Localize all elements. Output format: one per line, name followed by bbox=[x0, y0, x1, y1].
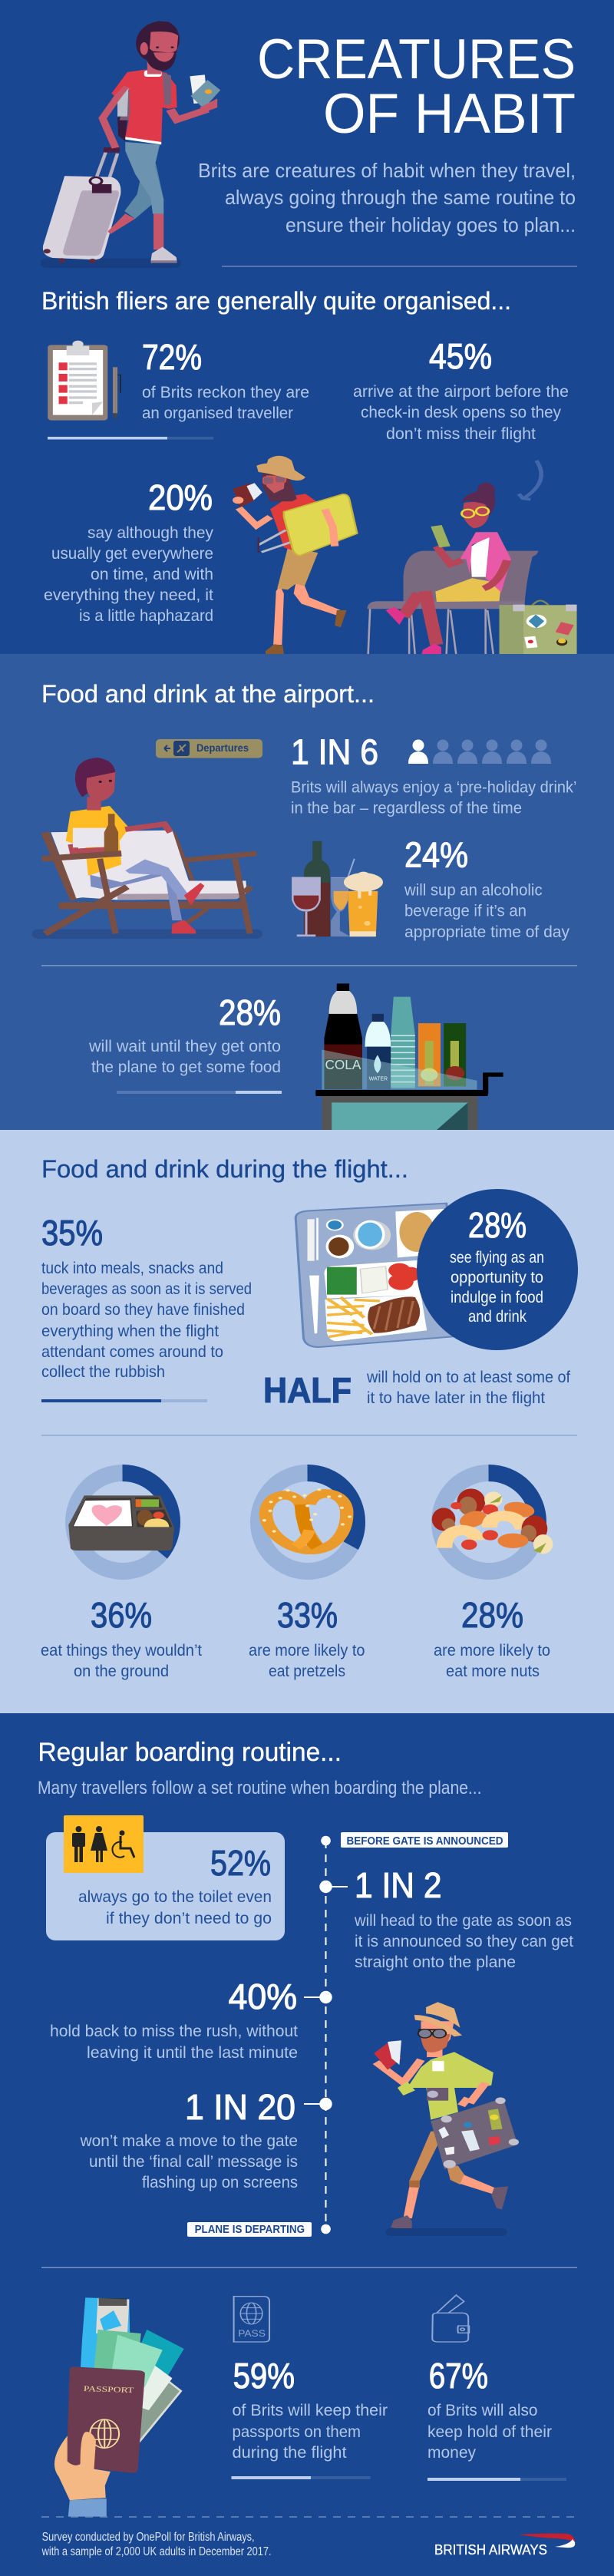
intro text: always going through the same routine to bbox=[225, 186, 576, 209]
source note: Survey conducted by OnePoll for British Airways, bbox=[42, 2531, 255, 2544]
stat: 59% bbox=[232, 2356, 388, 2479]
stat: 28% wait: will wait until they get onto bbox=[88, 1037, 281, 1055]
callout: 28% circle: 28% bbox=[468, 1205, 527, 1245]
timeline bbox=[304, 1836, 348, 2234]
illustration: drinks trolley: WATER bbox=[369, 1075, 388, 1082]
icon: wallet outline bbox=[432, 2295, 469, 2342]
stat: 28% wait: the plane to get some food bbox=[91, 1058, 281, 1076]
stat: 67%: keep hold of their bbox=[427, 2422, 552, 2441]
icon: drinks bbox=[292, 841, 383, 936]
stat: 45%: 45% bbox=[429, 336, 492, 376]
illustration: drinks trolley: COLA bbox=[325, 1058, 361, 1072]
stat: 28% nuts: are more likely to bbox=[434, 1641, 550, 1660]
stat: 24%: will sup an alcoholic bbox=[404, 881, 543, 900]
illustration: man with hat and suitcase bbox=[374, 2002, 519, 2236]
stat: 28% nuts: 28% bbox=[461, 1595, 523, 1635]
stat: 20%: say although they bbox=[87, 523, 213, 542]
card: 52% toilet bbox=[46, 1815, 285, 1940]
stat: half: will hold on to at least some of bbox=[366, 1368, 570, 1386]
stat: 24% bbox=[404, 835, 569, 941]
stat: 36%: on the ground bbox=[74, 1662, 169, 1680]
heading: Food and drink during the flight... bbox=[41, 1155, 408, 1183]
stat: 20%: 20% bbox=[148, 477, 213, 517]
stat: 72%: 72% bbox=[142, 337, 202, 377]
stat: 1 in 2: it is announced so they can get bbox=[355, 1932, 573, 1950]
stat: 24%: appropriate time of day bbox=[404, 923, 569, 941]
stat: 1 in 20: flashing up on screens bbox=[142, 2173, 298, 2191]
stat: 40% bbox=[50, 1977, 298, 2062]
stat: 20%: on time, and with bbox=[91, 565, 213, 583]
icon: pretzel bbox=[262, 1488, 352, 1550]
panel: regular boarding routine bbox=[0, 1713, 614, 2576]
stat: 28% nuts bbox=[434, 1595, 550, 1680]
stat: 72% bbox=[48, 337, 309, 439]
title: CREATURES bbox=[257, 28, 576, 91]
callout: 28% circle: indulge in food bbox=[451, 1288, 543, 1306]
icon: people row bbox=[408, 740, 551, 764]
stat: 1 in 20: 1 IN 20 bbox=[185, 2087, 295, 2127]
logo: British Airways: BRITISH AIRWAYS bbox=[434, 2542, 547, 2558]
stat: 1 in 20: won’t make a move to the gate bbox=[80, 2132, 298, 2150]
stat: 1 in 6: 1 IN 6 bbox=[291, 732, 378, 772]
illustration: hand holding passport, tickets and cash: PASSPORT bbox=[83, 2384, 134, 2395]
callout: 28% circle: see flying as an bbox=[450, 1248, 544, 1267]
illustration: meal tray bbox=[295, 1204, 466, 1347]
stat: half bbox=[263, 1368, 570, 1410]
card: 52% toilet: 52% bbox=[210, 1843, 271, 1883]
illustration: drinks trolley bbox=[315, 983, 503, 1134]
callout: 28% circle: and drink bbox=[468, 1307, 527, 1326]
stat: half: it to have later in the flight bbox=[367, 1389, 545, 1407]
icon: bento box bbox=[68, 1495, 174, 1551]
stat: 33%: 33% bbox=[277, 1595, 338, 1635]
stat: 67% bbox=[427, 2356, 566, 2481]
stat: 1 in 6: in the bar – regardless of the time bbox=[291, 798, 522, 817]
stat: 45% bbox=[353, 336, 569, 443]
stat: 28% wait bbox=[88, 992, 282, 1094]
illustration: hand holding passport, tickets and cash bbox=[54, 2297, 184, 2517]
icon: clipboard bbox=[48, 341, 120, 421]
stat: 24%: beverage if it’s an bbox=[404, 901, 527, 920]
stat: 20%: everything they need, it bbox=[44, 586, 213, 604]
stat: 1 in 6 bbox=[291, 732, 577, 817]
stat: 1 in 20: until the ‘final call’ message is bbox=[89, 2152, 298, 2171]
departures sign bbox=[156, 739, 262, 758]
intro text: ensure their holiday goes to plan... bbox=[286, 213, 576, 236]
donut: 33% bbox=[259, 1473, 357, 1571]
stat: 67%: of Brits will also bbox=[427, 2401, 538, 2419]
stat: 1 in 6: Brits will always enjoy a ‘pre-holiday drink’ bbox=[291, 778, 577, 797]
callout: 28% circle bbox=[417, 1189, 578, 1350]
source note: with a sample of 2,000 UK adults in December 2017. bbox=[41, 2545, 272, 2558]
stat: 72%: an organised traveller bbox=[142, 404, 293, 422]
stat: 28% wait: 28% bbox=[219, 992, 281, 1032]
donut: 36% bbox=[74, 1473, 172, 1571]
stat: 59%: passports on them bbox=[232, 2422, 361, 2441]
stat: 45%: don’t miss their flight bbox=[386, 424, 536, 443]
label: plane departing: PLANE IS DEPARTING bbox=[195, 2224, 305, 2236]
subheading: Many travellers follow a set routine when boarding the plane... bbox=[38, 1778, 482, 1798]
panel: intro and organised fliers bbox=[0, 0, 614, 656]
stat: 35%: collect the rubbish bbox=[41, 1362, 165, 1381]
logo: British Airways bbox=[434, 2534, 575, 2558]
heading: Regular boarding routine... bbox=[38, 1738, 342, 1767]
stat: 33% bbox=[249, 1595, 365, 1680]
stat: 1 in 2 bbox=[354, 1865, 573, 1971]
stat: 72%: of Brits reckon they are bbox=[142, 383, 309, 401]
icon: toilet sign bbox=[64, 1815, 144, 1873]
stat: 33%: eat pretzels bbox=[269, 1662, 345, 1680]
icon: passport outline: PASS bbox=[238, 2329, 266, 2339]
stat: 59%: of Brits will keep their bbox=[232, 2401, 388, 2419]
illustration: man with suitcase bbox=[41, 21, 220, 268]
intro text: Brits are creatures of habit when they travel, bbox=[198, 159, 576, 182]
stat: 35%: 35% bbox=[41, 1213, 103, 1253]
stat: 35%: attendant comes around to bbox=[41, 1342, 223, 1361]
stat: 1 in 2: 1 IN 2 bbox=[355, 1865, 442, 1905]
source note bbox=[41, 2531, 272, 2558]
stat: 36%: eat things they wouldn’t bbox=[41, 1641, 202, 1660]
stat: 35%: everything when the flight bbox=[41, 1322, 219, 1340]
stat: 45%: check-in desk opens so they bbox=[361, 403, 561, 421]
title: OF HABIT bbox=[323, 83, 576, 145]
stat: half: HALF bbox=[263, 1370, 352, 1410]
stat: 35%: on board so they have finished bbox=[41, 1300, 245, 1319]
illustration: woman with yellow case bbox=[233, 456, 357, 655]
stat: 59%: 59% bbox=[233, 2356, 295, 2396]
card: 52% toilet: if they don’t need to go bbox=[106, 1909, 272, 1927]
label: before gate: BEFORE GATE IS ANNOUNCED bbox=[347, 1835, 503, 1848]
intro text bbox=[198, 159, 576, 236]
stat: 35%: beverages as soon as it is served bbox=[41, 1280, 252, 1298]
stat: 33%: are more likely to bbox=[249, 1641, 365, 1660]
callout: 28% circle: opportunity to bbox=[451, 1268, 543, 1286]
illustration: man on lounge chair bbox=[32, 758, 262, 939]
stat: 67%: money bbox=[427, 2443, 476, 2462]
stat: 1 in 2: will head to the gate as soon as bbox=[354, 1911, 572, 1930]
stat: 1 in 2: straight onto the plane bbox=[355, 1953, 516, 1971]
stat: 45%: arrive at the airport before the bbox=[353, 382, 569, 401]
title bbox=[257, 28, 576, 145]
stat: 35%: tuck into meals, snacks and bbox=[41, 1259, 223, 1277]
stat: 67%: 67% bbox=[429, 2356, 488, 2396]
stat: 20%: is a little haphazard bbox=[79, 606, 213, 625]
stat: 24%: 24% bbox=[404, 835, 468, 875]
stat: 20%: usually get everywhere bbox=[51, 544, 213, 563]
icon: nuts bbox=[432, 1488, 553, 1554]
panel: food and drink during the flight bbox=[0, 1130, 614, 1713]
stat: 40%: leaving it until the last minute bbox=[87, 2043, 298, 2062]
stat: 40%: hold back to miss the rush, without bbox=[50, 2022, 298, 2040]
stat: 36%: 36% bbox=[91, 1595, 152, 1635]
panel: food and drink at the airport bbox=[0, 654, 614, 1134]
heading: Food and drink at the airport... bbox=[41, 680, 375, 708]
donut: 28% bbox=[440, 1473, 538, 1571]
icon: passport outline bbox=[234, 2297, 269, 2342]
stat: 59%: during the flight bbox=[232, 2443, 347, 2462]
stat: 1 in 20 bbox=[80, 2087, 298, 2191]
stat: 40%: 40% bbox=[229, 1977, 297, 2016]
card: 52% toilet: always go to the toilet even bbox=[78, 1887, 272, 1906]
arrow bbox=[519, 461, 541, 500]
stat: 28% nuts: eat more nuts bbox=[446, 1662, 540, 1680]
stat: 35% bbox=[41, 1213, 252, 1402]
departures sign: Departures bbox=[196, 742, 249, 754]
stat: 36% bbox=[41, 1595, 202, 1680]
heading: British fliers are generally quite organised... bbox=[41, 287, 511, 315]
illustration: seated woman on bench bbox=[368, 482, 577, 656]
stat: 20% bbox=[44, 477, 213, 625]
